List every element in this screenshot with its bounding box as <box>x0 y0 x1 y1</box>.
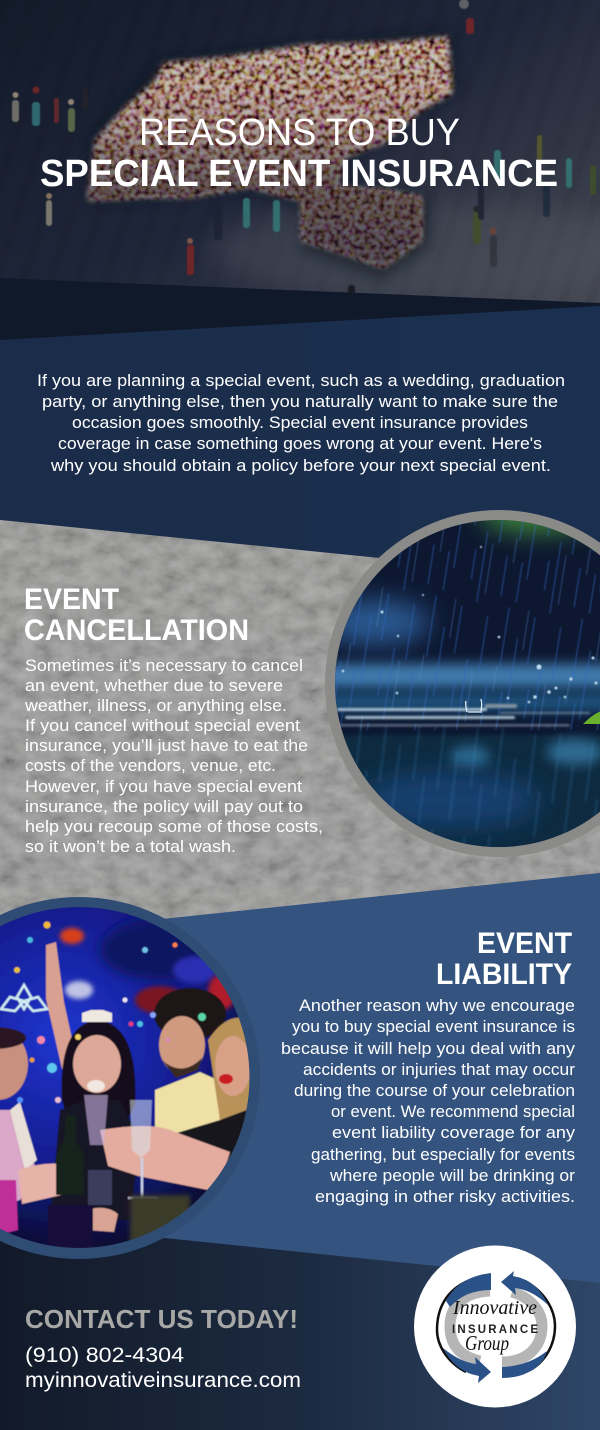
panel: footer <box>0 1221 600 1430</box>
heading: event liability: LIABILITY <box>436 958 572 991</box>
gray oval arcs <box>450 1291 542 1362</box>
heading: event cancellation <box>24 583 249 647</box>
text: event cancellation body: an event, whether due to severe <box>25 677 283 695</box>
text: event cancellation body: help you recoup some of those costs, <box>25 818 323 836</box>
text: event cancellation body: costs of the vendors, venue, etc. <box>25 757 276 775</box>
text: event liability body: engaging in other risky activities. <box>315 1188 575 1206</box>
text: event liability body: where people will be drinking or <box>329 1167 576 1185</box>
text: event cancellation body: weather, illness, or anything else. <box>24 697 287 715</box>
panel: intro band <box>0 306 600 600</box>
text: event cancellation body: If you cancel without special event <box>25 717 300 735</box>
text: event cancellation body <box>24 657 323 856</box>
website: myinnovativeinsurance.com <box>25 1368 301 1392</box>
heading: event liability: EVENT <box>477 927 572 960</box>
intro text: occasion goes smoothly. Special event insurance provides <box>72 414 528 432</box>
logo: Innovative Insurance Group <box>414 1246 576 1408</box>
intro text: coverage in case something goes wrong at your event. Here's <box>58 435 542 453</box>
confetti <box>0 922 206 1103</box>
text: event liability body: because it will help you deal with any <box>281 1040 576 1058</box>
crowd shape <box>88 30 460 280</box>
text: event liability body: you to buy special event insurance is <box>292 1018 575 1036</box>
heading: event cancellation: EVENT <box>24 583 119 616</box>
panel: event cancellation concrete <box>0 510 600 940</box>
text: event liability body: accidents or injuries that may occur <box>303 1061 576 1079</box>
logo: Innovative Insurance Group: INSURANCE <box>452 1324 538 1336</box>
panel: hero photo background <box>0 0 600 345</box>
intro text: If you are planning a special event, such as a wedding, graduation <box>37 372 565 390</box>
blue arrows <box>443 1271 548 1383</box>
logo: Innovative Insurance Group: Group <box>465 1331 509 1355</box>
intro text: why you should obtain a policy before your next special event. <box>50 457 551 475</box>
text: event liability body: or event. We recommend special <box>331 1103 575 1121</box>
text: event cancellation body: insurance, you’ll just have to eat the <box>25 737 308 755</box>
title <box>40 112 558 195</box>
intro text: party, or anything else, then you naturally want to make sure the <box>42 393 558 411</box>
text: event liability body: event liability coverage for any <box>332 1124 576 1142</box>
text: event liability body <box>281 997 576 1206</box>
logo: Innovative Insurance Group: Innovative <box>452 1297 537 1319</box>
contact block <box>25 1304 301 1392</box>
central woman <box>50 1010 140 1220</box>
intro text <box>37 372 565 475</box>
text: event liability body: gathering, but especially for events <box>311 1146 575 1164</box>
left woman <box>0 1027 37 1240</box>
title: SPECIAL EVENT INSURANCE <box>40 153 558 195</box>
panel: event liability blue <box>0 873 600 1283</box>
text: event cancellation body: so it won’t be a total wash. <box>25 838 236 856</box>
photo: party toast in circle <box>0 897 260 1260</box>
text: event liability body: during the course of your celebration <box>294 1082 575 1100</box>
text: event cancellation body: Sometimes it’s necessary to cancel <box>25 657 303 675</box>
photo: rain on water in circle <box>320 492 600 860</box>
text: event cancellation body: insurance, the policy will pay out to <box>25 798 303 816</box>
text: event liability body: Another reason why we encourage <box>299 997 575 1015</box>
woman on right <box>177 1016 250 1160</box>
title: REASONS TO BUY <box>139 112 460 154</box>
contact heading: CONTACT US TODAY! <box>25 1304 298 1334</box>
man in yellow shirt <box>154 988 226 1134</box>
text: event cancellation body: However, if you have special event <box>25 778 302 796</box>
scattered people <box>12 0 596 313</box>
phone number: (910) 802-4304 <box>25 1343 184 1367</box>
heading: event liability <box>436 927 572 991</box>
black outer arcs <box>437 1280 555 1372</box>
heading: event cancellation: CANCELLATION <box>24 614 249 647</box>
hands and glasses <box>18 1095 230 1255</box>
panel: dark band under hero <box>0 278 600 345</box>
